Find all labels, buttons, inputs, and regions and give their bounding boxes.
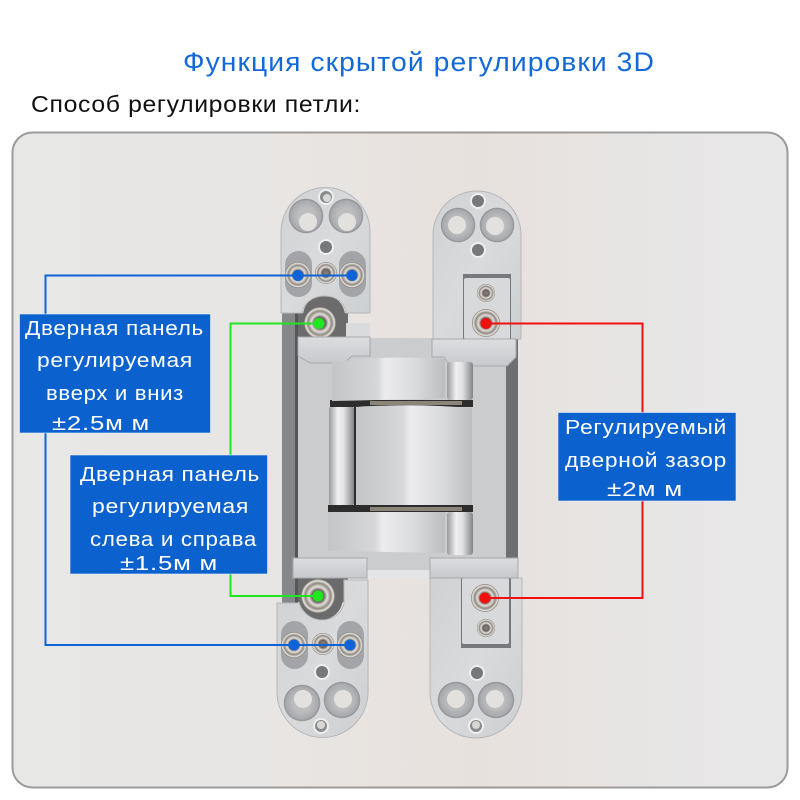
left bottom plate [277, 579, 368, 738]
callout: left and right adjustment: регулируемая [92, 496, 249, 518]
right top plate [433, 191, 521, 339]
connector: red door gap [480, 318, 642, 604]
hinge photo [277, 188, 522, 738]
left top plate [281, 188, 370, 339]
callout: left and right adjustment: ±1.5м м [120, 553, 218, 575]
callout: left and right adjustment [70, 455, 268, 575]
callout: door gap adjustment: дверной зазор [565, 450, 727, 472]
callout: up and down adjustment: вверх и вниз [46, 383, 184, 405]
callout: left and right adjustment: слева и справа [90, 529, 257, 551]
connector: blue up and down [46, 270, 358, 650]
upper brackets [298, 337, 516, 366]
connector: green left and right [230, 318, 324, 602]
callout: up and down adjustment: ±2.5м м [52, 413, 150, 435]
callout: door gap adjustment: Регулируемый [565, 417, 727, 439]
callout: door gap adjustment [558, 412, 736, 501]
frame body [280, 295, 520, 620]
right bottom plate [430, 578, 522, 738]
subtitle: Способ регулировки петли: [31, 91, 361, 117]
title: Функция скрытой регулировки 3D [183, 47, 655, 77]
hinge knuckles [328, 358, 473, 555]
callout: left and right adjustment: Дверная панель [80, 464, 260, 486]
callout: up and down adjustment [20, 314, 210, 435]
callout: up and down adjustment: регулируемая [37, 350, 193, 372]
callout: up and down adjustment: Дверная панель [25, 318, 204, 340]
lower brackets [293, 558, 518, 578]
callout: door gap adjustment: ±2м м [607, 479, 683, 501]
panel: photo background [12, 132, 788, 788]
